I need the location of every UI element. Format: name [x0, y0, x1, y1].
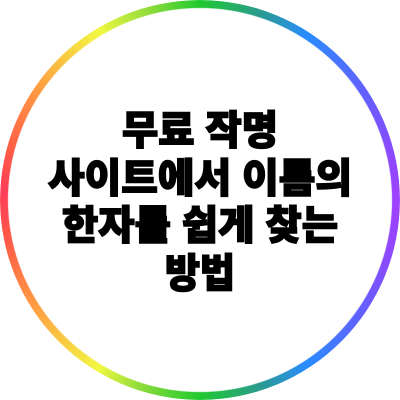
title: 무료 작명 [122, 109, 278, 153]
title: 한자를 쉽게 찾는 [62, 204, 338, 248]
title: 방법 [165, 252, 235, 296]
title: 사이트에서 이름의 [48, 157, 352, 201]
